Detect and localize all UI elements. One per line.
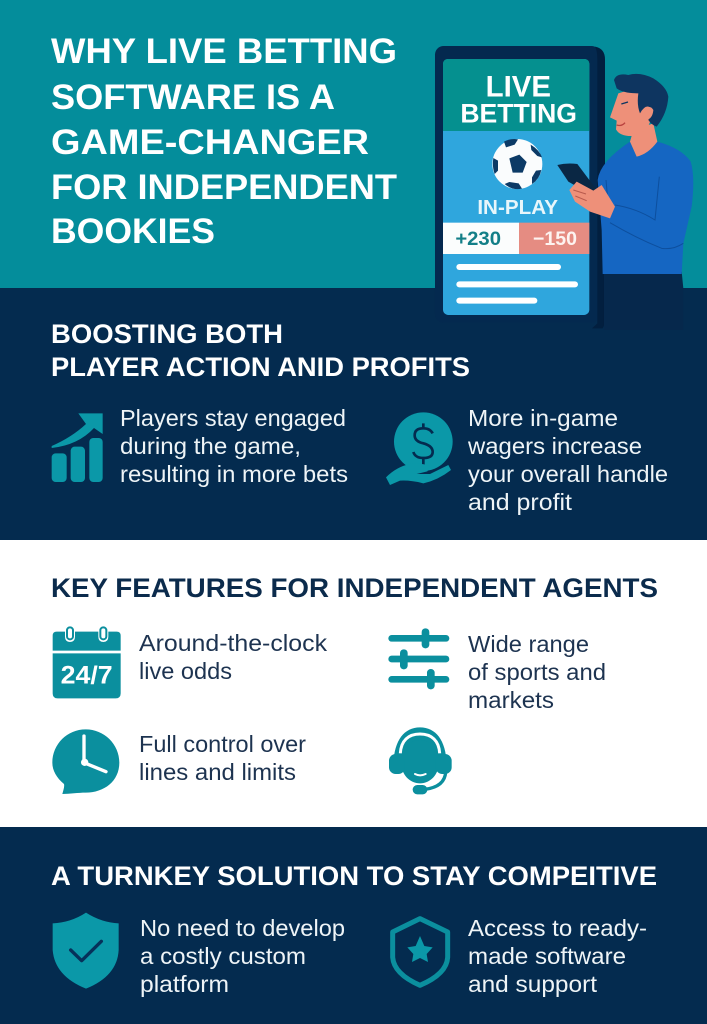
title	[51, 32, 397, 251]
phone screen: LIVE	[486, 71, 551, 104]
text: in-game wagers: and profit	[468, 489, 573, 515]
text: custom platform: No need to develop	[140, 915, 345, 941]
text: players engaged	[120, 405, 348, 487]
odds row: −150	[533, 229, 577, 250]
icon: headset	[389, 727, 452, 794]
text: sports and markets: markets	[468, 687, 554, 713]
icon: growth chart	[52, 413, 103, 482]
text: live odds	[139, 630, 328, 684]
panel: features background	[0, 540, 707, 827]
phone screen: BETTING	[460, 98, 577, 128]
title: BOOKIES	[51, 212, 215, 251]
text: players engaged: resulting in more bets	[120, 461, 348, 487]
text: players engaged: Players stay engaged	[120, 405, 346, 431]
text: in-game wagers: your overall handle	[468, 461, 668, 487]
text: custom platform	[140, 915, 345, 997]
heading: boosting	[51, 319, 470, 382]
phone screen	[443, 59, 589, 315]
icon: hand holding dollar coin	[386, 412, 453, 485]
odds row	[443, 223, 589, 254]
heading: boosting: BOOSTING BOTH	[51, 319, 283, 349]
text: ready-made software	[468, 915, 647, 997]
title: WHY LIVE BETTING	[51, 32, 397, 71]
text: sports and markets: of sports and	[468, 659, 606, 685]
text: live odds: Around-the-clock	[139, 630, 328, 656]
text: in-game wagers: wagers increase	[467, 433, 642, 459]
text: sports and markets: Wide range	[468, 631, 589, 657]
icon: soccer ball	[492, 139, 542, 189]
icon: shield star	[393, 919, 448, 985]
icon: calendar 24/7: 24/7	[61, 662, 113, 689]
icon: clock speech bubble	[52, 729, 119, 794]
odds row: +230	[455, 229, 501, 250]
text: live odds: live odds	[139, 658, 232, 684]
text: in-game wagers	[467, 405, 668, 515]
text: players engaged: during the game,	[120, 433, 301, 459]
phone body	[435, 46, 605, 328]
icon: shield check	[53, 913, 119, 989]
title: SOFTWARE IS A	[51, 78, 335, 117]
text: custom platform: a costly custom	[140, 943, 306, 969]
text: lines and limits	[139, 731, 306, 785]
person	[598, 74, 693, 330]
text: ready-made software: and support	[468, 971, 598, 997]
heading: key features: KEY FEATURES FOR INDEPENDENT AGENTS	[51, 573, 658, 603]
illustration: phone and person	[435, 46, 693, 330]
heading: boosting: PLAYER ACTION ANID PROFITS	[51, 352, 470, 382]
hand with tablet	[557, 164, 615, 218]
text: lines and limits: Full control over	[139, 731, 306, 757]
text: lines and limits: lines and limits	[139, 759, 296, 785]
panel: header background	[0, 0, 707, 288]
panel: boosting background	[0, 288, 707, 540]
text: ready-made software: made software	[468, 943, 626, 969]
title: GAME-CHANGER	[51, 123, 369, 162]
text: custom platform: platform	[140, 971, 229, 997]
text: sports and markets	[468, 631, 606, 713]
icon: sliders	[388, 628, 449, 689]
icon: calendar 24/7	[53, 627, 121, 698]
text: ready-made software: Access to ready-	[468, 915, 647, 941]
panel: turnkey background	[0, 827, 707, 1024]
text lines	[456, 264, 578, 304]
text: in-game wagers: More in-game	[468, 405, 618, 431]
title: FOR INDEPENDENT	[51, 168, 397, 207]
heading: turnkey solution: A TURNKEY SOLUTION TO STAY COMPEITIVE	[51, 861, 657, 891]
in-play label: IN-PLAY	[477, 197, 558, 219]
